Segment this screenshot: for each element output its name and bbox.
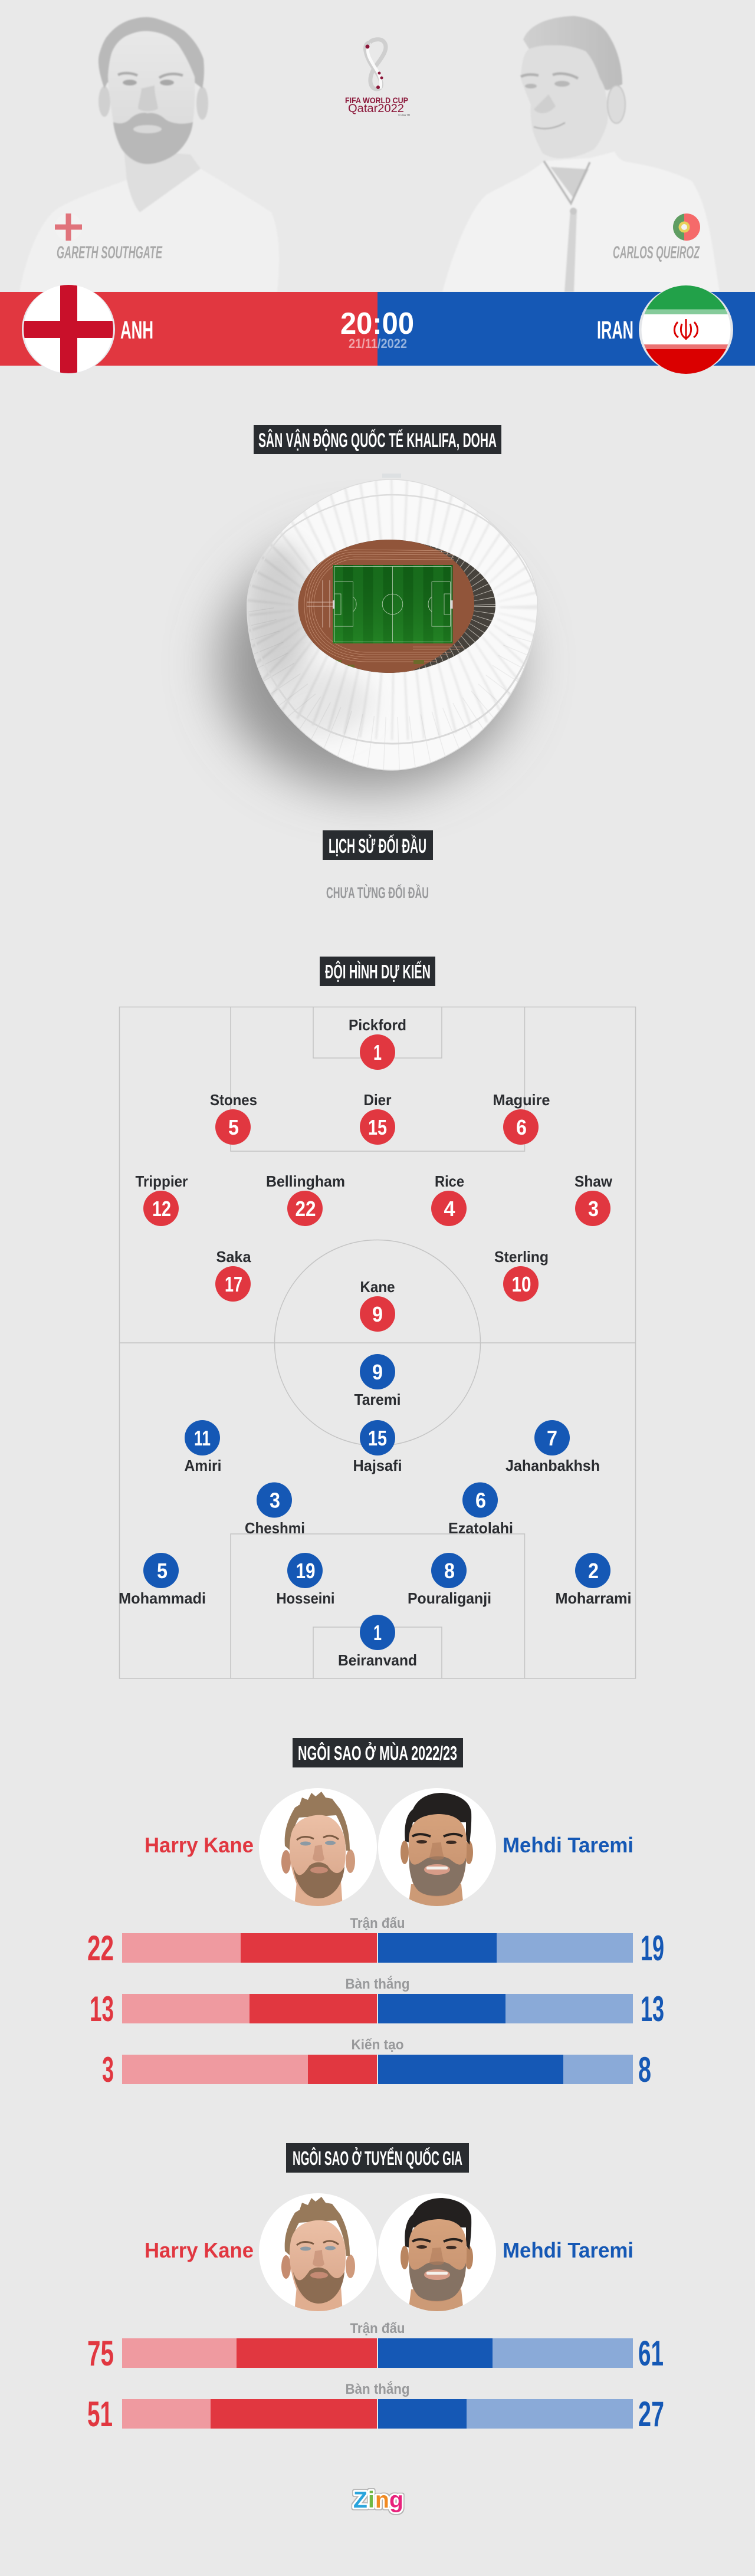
stat: goals season: Bàn thắng: [346, 1976, 409, 1992]
player: Moharrami: Moharrami: [556, 1589, 631, 1607]
player: Saka: Saka: [216, 1248, 251, 1266]
heading: stars with national team: NGÔI SAO Ở TUYỂN QUỐC GIA: [293, 2147, 462, 2169]
heading: predicted line-ups: ĐỘI HÌNH DỰ KIẾN: [325, 960, 431, 983]
player: Cheshmi: 3: [270, 1489, 280, 1512]
portrait: Harry Kane national: [259, 2193, 377, 2312]
player: Pickford: 1: [373, 1040, 382, 1064]
player: Jahanbakhsh: Jahanbakhsh: [505, 1457, 600, 1474]
coach: Carlos Queiroz portrait: [442, 16, 720, 292]
pitch lines: [119, 1007, 636, 1678]
stat: assists season: 8: [638, 2050, 651, 2089]
player: Kane: [360, 1278, 395, 1332]
player: Moharrami: [556, 1553, 631, 1607]
player: Taremi: Taremi: [354, 1391, 401, 1408]
portrait: Mehdi Taremi: [378, 1788, 496, 1907]
player: Sterling: [494, 1248, 549, 1302]
name: Harry Kane: Harry Kane: [145, 1833, 254, 1857]
portrait: Mehdi Taremi national: [378, 2193, 496, 2312]
flag icon: Portugal small: [673, 213, 700, 241]
heading: stars in season 2022/23: NGÔI SAO Ở MÙA 2022/23: [298, 1742, 457, 1764]
text: never met: CHƯA TỪNG ĐỐI ĐẦU: [326, 883, 429, 902]
player: Saka: [215, 1248, 251, 1302]
player: Stones: 5: [228, 1115, 239, 1139]
stadium illustration: [218, 474, 538, 790]
player: Stones: [210, 1091, 257, 1145]
heading: stars in season 2022/23: [293, 1738, 463, 1767]
player: Jahanbakhsh: [505, 1420, 600, 1474]
player: Cheshmi: Cheshmi: [245, 1519, 305, 1537]
player: Rice: 4: [444, 1197, 455, 1221]
player: Mohammadi: Mohammadi: [119, 1589, 206, 1607]
player: Kane: Kane: [360, 1278, 395, 1296]
flag icon: England small: [55, 213, 82, 241]
logo: FIFA World Cup Qatar 2022: © FIFA TM: [398, 113, 410, 117]
player: Hosseini: [276, 1553, 335, 1607]
logo: Zing: n: [375, 2488, 389, 2513]
player: Trippier: [136, 1172, 188, 1226]
coach name: Gareth Southgate: GARETH SOUTHGATE: [57, 243, 163, 262]
heading: stadium: SÂN VẬN ĐỘNG QUỐC TẾ KHALIFA, DOHA: [258, 429, 497, 452]
logo: FIFA World Cup Qatar 2022: FIFA WORLD CUP: [345, 96, 408, 105]
logo: FIFA World Cup Qatar 2022: Qatar2022: [348, 103, 404, 115]
player: Bellingham: 22: [295, 1197, 316, 1221]
player: Hajsafi: 15: [368, 1426, 387, 1450]
player: Beiranvand: Beiranvand: [338, 1651, 417, 1669]
stat: goals season: 13: [90, 1989, 114, 2029]
logo: Zing: g: [389, 2488, 403, 2513]
player: Hosseini: Hosseini: [276, 1589, 335, 1607]
player: Amiri: [184, 1420, 222, 1474]
stat: matches season: Trận đấu: [350, 1915, 405, 1931]
player: Rice: Rice: [435, 1172, 464, 1190]
player: Maguire: Maguire: [493, 1091, 550, 1109]
stat: matches season: 22: [87, 1928, 114, 1968]
player: Mohammadi: 5: [157, 1559, 168, 1583]
kick-off time: 20:00: [340, 307, 414, 341]
name: Harry Kane national: Harry Kane: [145, 2238, 254, 2262]
player: Hajsafi: [353, 1420, 402, 1474]
player: Sterling: Sterling: [494, 1248, 549, 1266]
player: Ezatolahi: Ezatolahi: [448, 1519, 513, 1537]
stat: goals season: 13: [641, 1989, 664, 2029]
player: Pouraliganji: [408, 1553, 491, 1607]
team Iran players: [119, 1354, 631, 1669]
player: Bellingham: Bellingham: [266, 1172, 345, 1190]
player: Pickford: Pickford: [349, 1016, 406, 1034]
player: Maguire: 6: [516, 1115, 527, 1139]
stadium opening and stands: [295, 537, 498, 675]
player: Ezatolahi: 6: [475, 1489, 486, 1512]
player: Hosseini: 19: [296, 1559, 315, 1583]
player: Beiranvand: [338, 1615, 417, 1669]
player: Jahanbakhsh: 7: [547, 1426, 557, 1450]
portrait: Harry Kane: [259, 1788, 377, 1907]
coach: Gareth Southgate portrait: [19, 17, 279, 292]
player: Pickford: [349, 1016, 406, 1070]
player: Bellingham: [266, 1172, 345, 1226]
player: Trippier: 12: [152, 1197, 171, 1221]
stat: matches national: [87, 2321, 664, 2373]
stat: goals national: 51: [87, 2394, 113, 2434]
flag: Iran: [639, 285, 733, 374]
player: Hajsafi: Hajsafi: [353, 1457, 402, 1474]
player: Dier: 15: [368, 1115, 387, 1139]
player: Taremi: 9: [372, 1360, 383, 1384]
player: Pouraliganji: Pouraliganji: [408, 1589, 491, 1607]
player: Stones: Stones: [210, 1091, 257, 1109]
heading: head-to-head history: LỊCH SỬ ĐỐI ĐẦU: [329, 834, 426, 857]
player: Amiri: Amiri: [184, 1457, 222, 1474]
match date: 21/11/2022: [349, 336, 407, 351]
player: Kane: 9: [372, 1302, 383, 1326]
stat: assists season: 3: [102, 2050, 114, 2089]
team name: Anh: ANH: [120, 316, 153, 344]
player: Shaw: 3: [588, 1197, 599, 1221]
player: Dier: [360, 1091, 395, 1145]
stat: goals national: [87, 2381, 664, 2434]
football pitch in stadium: [333, 565, 453, 643]
stat: matches national: 75: [87, 2334, 114, 2373]
player: Amiri: 11: [194, 1426, 211, 1450]
stat: matches national: Trận đấu: [350, 2321, 405, 2337]
stat: goals season: [90, 1976, 664, 2029]
player: Dier: Dier: [363, 1091, 392, 1109]
name: Mehdi Taremi: Mehdi Taremi: [503, 1833, 633, 1857]
heading: stadium: [254, 425, 501, 454]
heading: predicted line-ups: [320, 957, 435, 986]
stat: matches season: 19: [641, 1928, 664, 1968]
player: Rice: [431, 1172, 467, 1226]
player: Mohammadi: [119, 1553, 206, 1607]
player: Saka: 17: [225, 1272, 242, 1296]
stat: matches season: [87, 1915, 664, 1968]
logo: Zing: Z: [353, 2488, 367, 2513]
stat: assists season: [102, 2037, 651, 2089]
logo: Zing: i: [368, 2488, 375, 2513]
name: Mehdi Taremi national: Mehdi Taremi: [503, 2238, 633, 2262]
stat: matches national: 61: [638, 2334, 664, 2373]
stat: goals national: 27: [638, 2394, 664, 2434]
match band: [0, 292, 755, 366]
stat: assists season: Kiến tạo: [352, 2037, 403, 2053]
logo: FIFA World Cup Qatar 2022: [345, 40, 410, 117]
team name: Iran: IRAN: [597, 316, 633, 344]
player: Moharrami: 2: [588, 1559, 599, 1583]
player: Cheshmi: [245, 1483, 305, 1537]
player: Beiranvand: 1: [373, 1621, 382, 1645]
heading: stars with national team: [286, 2143, 469, 2173]
player: Trippier: Trippier: [136, 1172, 188, 1190]
player: Sterling: 10: [512, 1272, 531, 1296]
player: Shaw: [575, 1172, 613, 1226]
player: Ezatolahi: [448, 1483, 513, 1537]
player: Taremi: [354, 1354, 401, 1408]
player: Pouraliganji: 8: [444, 1559, 455, 1583]
player: Shaw: Shaw: [575, 1172, 613, 1190]
flag: England: [22, 285, 115, 374]
stat: goals national: Bàn thắng: [346, 2381, 409, 2397]
team England players: [136, 1016, 613, 1332]
player: Maguire: [493, 1091, 550, 1145]
heading: head-to-head history: [323, 830, 433, 860]
